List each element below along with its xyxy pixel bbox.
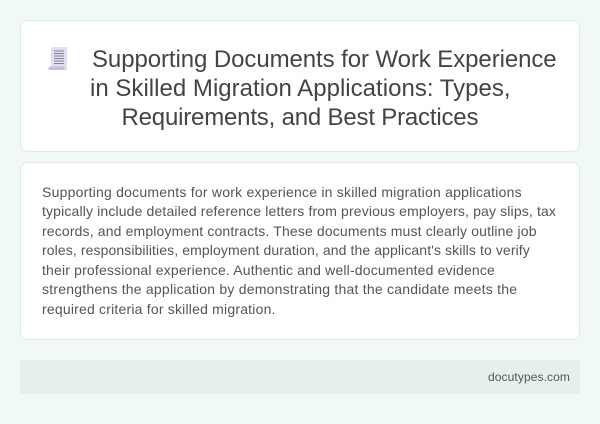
footer bar	[20, 360, 580, 394]
text block: description: their professional experience. Authentic and well-documented evidence	[42, 262, 495, 278]
text block: description: required criteria for skilled migration.	[42, 301, 276, 317]
panel: title card	[20, 20, 580, 152]
text block: description	[42, 184, 556, 317]
text block: description: Supporting documents for work experience in skilled migration applications	[42, 184, 522, 200]
footer text: site name: docutypes.com	[488, 370, 570, 384]
title: in Skilled Migration Applications: Types,	[90, 75, 511, 102]
panel: description card	[20, 162, 580, 340]
title: Requirements, and Best Practices	[122, 104, 478, 131]
icon: document scroll	[48, 47, 67, 70]
text block: description: strengthens the application by demonstrating that the candidate meets the	[42, 281, 517, 297]
text block: description: roles, responsibilities, employment duration, and the applicant's skills to verify	[42, 242, 530, 258]
text block: description: typically include detailed reference letters from previous employers, pay slips, tax	[42, 203, 556, 219]
text block: description: records, and employment contracts. These documents must clearly outline job	[42, 223, 537, 239]
title: Supporting Documents for Work Experience	[92, 46, 557, 73]
title	[90, 46, 557, 131]
